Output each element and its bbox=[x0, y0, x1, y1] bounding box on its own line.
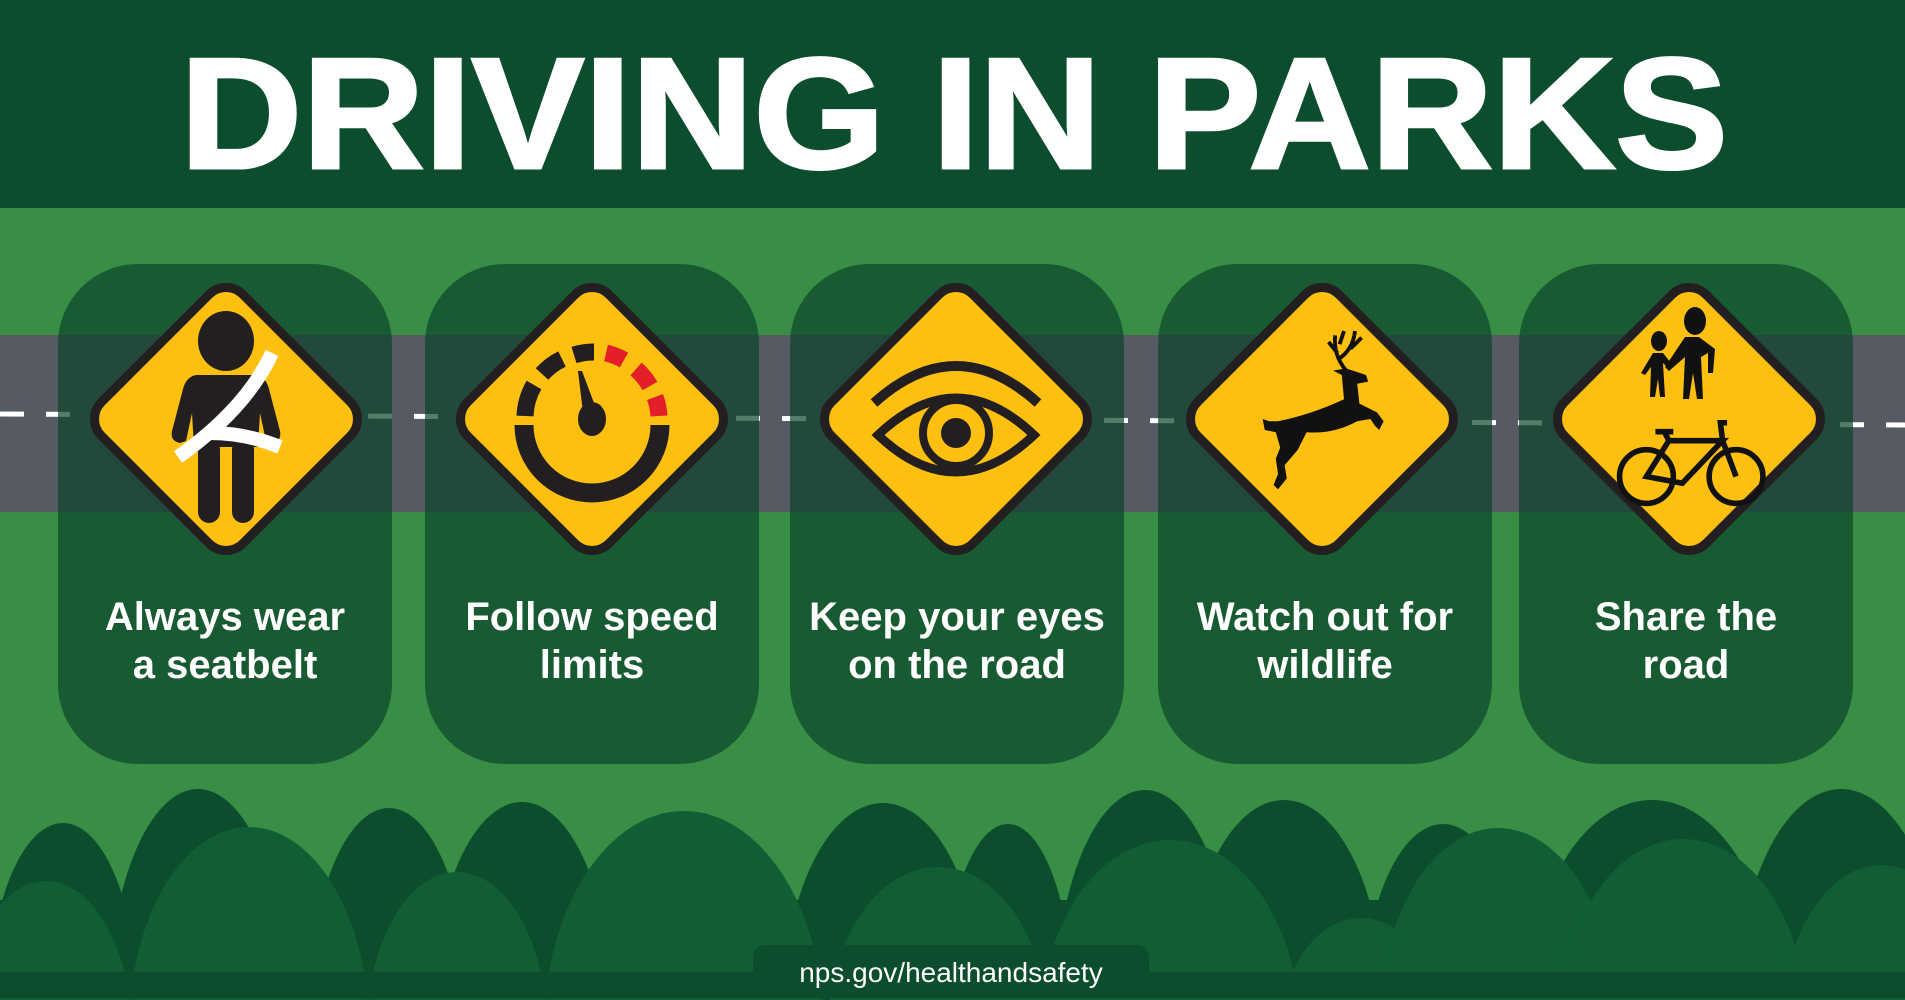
trees: front layer bbox=[0, 811, 1905, 1000]
url pill: nps.gov/healthandsafety bbox=[799, 957, 1103, 988]
footer band bbox=[0, 972, 1905, 998]
url pill bbox=[753, 945, 1149, 998]
icon: deer sign bbox=[1181, 278, 1463, 560]
card: seatbelt: a seatbelt bbox=[133, 643, 317, 687]
card: share bbox=[1519, 264, 1853, 764]
card: speed bbox=[425, 264, 759, 764]
icon: seatbelt sign bbox=[85, 278, 367, 560]
road bbox=[0, 335, 1905, 512]
card: seatbelt bbox=[58, 264, 392, 764]
card: eyes: on the road bbox=[848, 643, 1066, 687]
card: share: road bbox=[1643, 643, 1729, 687]
card: wildlife: wildlife bbox=[1257, 643, 1393, 687]
icon: speedometer sign bbox=[451, 278, 733, 560]
card: eyes bbox=[790, 264, 1124, 764]
card: speed: Follow speed bbox=[465, 595, 719, 639]
card: wildlife bbox=[1158, 264, 1492, 764]
card: share: Share the bbox=[1595, 595, 1777, 639]
card: seatbelt: Always wear bbox=[105, 595, 345, 639]
card: eyes: Keep your eyes bbox=[809, 595, 1105, 639]
card: speed: limits bbox=[540, 643, 644, 687]
icon: eye sign bbox=[815, 278, 1097, 560]
icon: share the road sign bbox=[1548, 278, 1830, 560]
card: wildlife: Watch out for bbox=[1197, 595, 1453, 639]
trees: back layer bbox=[0, 789, 1905, 1000]
header bar bbox=[0, 0, 1905, 208]
title: DRIVING IN PARKS bbox=[180, 26, 1728, 202]
